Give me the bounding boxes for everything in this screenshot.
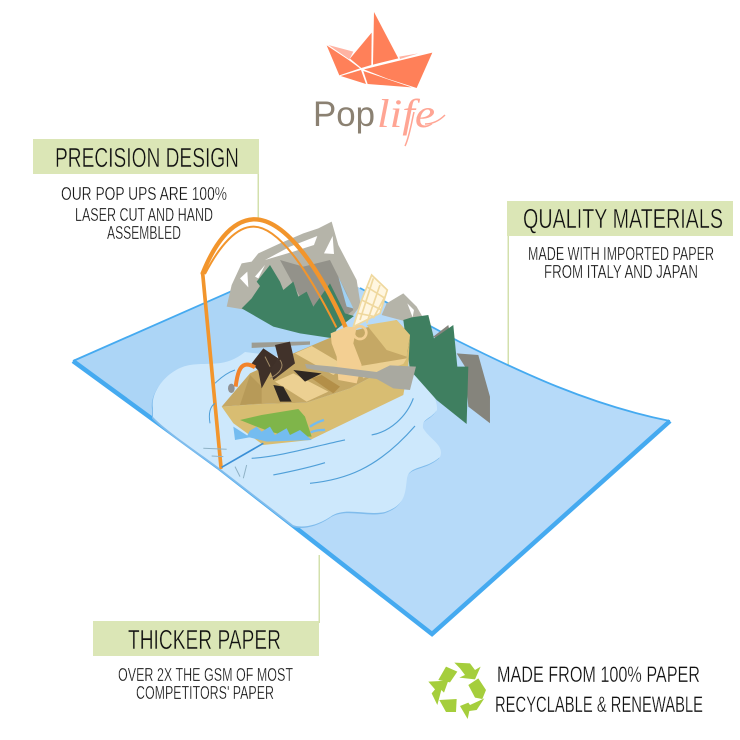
heading: thicker paper bbox=[93, 621, 319, 656]
pop-up scene bbox=[203, 219, 490, 483]
right trees bbox=[403, 315, 468, 424]
text: precision description: ASSEMBLED bbox=[107, 223, 181, 243]
text: quality description bbox=[528, 244, 714, 282]
panel: recyclable bbox=[428, 662, 703, 719]
lure bbox=[228, 384, 235, 393]
water paper bbox=[152, 352, 441, 528]
back oar bbox=[252, 341, 310, 348]
boat interior bbox=[222, 320, 410, 407]
dark legs figure bbox=[252, 342, 295, 388]
boat hull bbox=[222, 335, 410, 445]
water ripples bbox=[203, 370, 415, 483]
panel: thicker paper bbox=[93, 555, 320, 703]
text: thicker description: COMPETITORS' PAPER bbox=[136, 683, 274, 703]
pop-up card: fishing boat bbox=[73, 219, 670, 634]
card base pages bbox=[73, 261, 670, 634]
text: precision description bbox=[61, 184, 227, 243]
icon: recycle bbox=[428, 663, 486, 719]
rowing boat bbox=[222, 320, 410, 445]
boat seats bbox=[275, 346, 407, 402]
bear fisherman bbox=[331, 326, 366, 383]
panel: precision design bbox=[33, 139, 259, 243]
back-left trees bbox=[242, 265, 354, 338]
icon: paper boat bbox=[327, 12, 432, 88]
text: precision description: LASER CUT AND HAND bbox=[75, 205, 213, 225]
heading: thicker paper: THICKER PAPER bbox=[128, 624, 281, 655]
text: thicker description: OVER 2X THE GSM OF MOST bbox=[118, 665, 293, 685]
logo wordmark: Pop bbox=[313, 95, 375, 134]
landing net bbox=[353, 275, 387, 327]
text: recyclable claim bbox=[495, 662, 703, 717]
logo wordmark: life bbox=[377, 91, 435, 136]
text: thicker description bbox=[118, 665, 293, 703]
text: precision description: OUR POP UPS ARE 100% bbox=[61, 184, 227, 204]
heading: precision design: PRECISION DESIGN bbox=[55, 142, 239, 173]
front oar bbox=[305, 364, 416, 390]
orange hook bbox=[236, 365, 255, 387]
logo wordmark bbox=[313, 91, 445, 146]
fishing rod bbox=[203, 219, 345, 467]
logo: Poplife paper boat bbox=[313, 12, 445, 146]
fish and splash bbox=[233, 409, 325, 442]
heading: precision design bbox=[33, 139, 259, 174]
panel: quality materials bbox=[507, 201, 733, 365]
back mountains bbox=[227, 222, 490, 423]
